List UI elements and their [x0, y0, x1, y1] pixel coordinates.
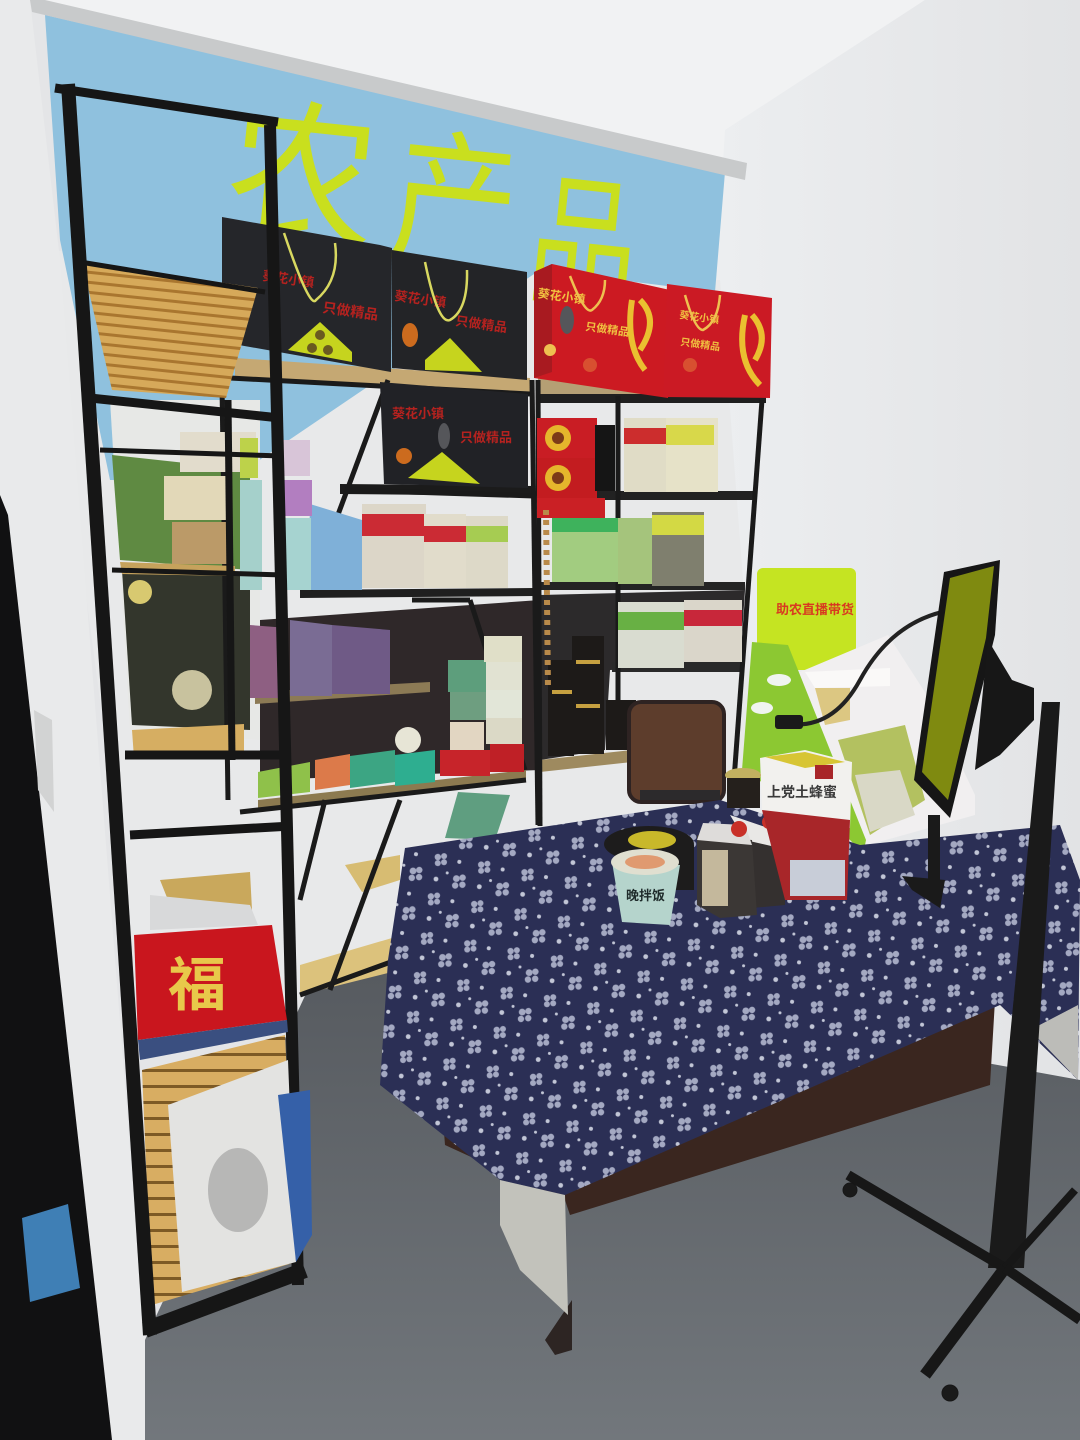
purple bags — [250, 620, 390, 698]
green sign — [757, 568, 856, 670]
stand pole — [988, 702, 1060, 1268]
right shelf unit — [538, 378, 766, 826]
phone clip — [775, 715, 803, 729]
gift box 1: 只做精品 — [322, 299, 379, 323]
instant noodle cup: 晚拌饭 — [626, 888, 665, 903]
products on right shelf — [537, 418, 742, 756]
cups on left tower — [164, 432, 312, 590]
brown chair — [629, 702, 724, 802]
roller blind bar — [30, 0, 747, 180]
stacked cups — [440, 636, 524, 776]
seed bags — [362, 504, 508, 588]
red gift box 1: 只做精品 — [585, 319, 630, 339]
red sunflower boxes — [537, 418, 615, 518]
red fu bags: 福 — [168, 953, 226, 1018]
middle shelf unit — [222, 358, 538, 995]
gift box 1: 葵花小镇 — [262, 268, 315, 290]
monitor — [914, 560, 1000, 818]
bagged product — [838, 725, 925, 835]
dark table body — [440, 990, 995, 1215]
gift box 3: 只做精品 — [460, 430, 512, 445]
left tall shelf — [55, 84, 305, 1335]
frame — [55, 84, 305, 1335]
bag under shelf — [445, 792, 510, 840]
products on table — [604, 750, 852, 925]
door hinge — [22, 1204, 80, 1302]
monitor mount — [975, 640, 1034, 770]
shelf frame — [222, 378, 538, 995]
white steps — [790, 635, 975, 850]
banner headline: 农 — [218, 83, 386, 274]
green side panel — [742, 642, 866, 845]
gift box 3 — [380, 382, 528, 488]
dark tub behind — [725, 768, 761, 808]
red gift box 2: 只做精品 — [680, 335, 721, 354]
honey jugs — [697, 815, 785, 918]
products on middle shelf — [250, 504, 524, 840]
blue banner with headline — [45, 15, 725, 480]
red gift box 1: 葵花小镇 — [537, 285, 586, 307]
gift box 2: 葵花小镇 — [394, 288, 447, 310]
beaded string — [546, 510, 548, 690]
gift box 1 — [222, 217, 392, 372]
black tubs — [548, 636, 636, 756]
gift box 2 — [392, 250, 527, 380]
monitor on stand — [843, 560, 1080, 1401]
blue bag — [308, 504, 362, 590]
ceiling — [30, 0, 925, 170]
bowl with lid — [604, 826, 694, 890]
green display stand — [742, 568, 975, 850]
red gift box 2 — [663, 284, 772, 398]
banner headline: 产 — [382, 116, 526, 295]
green sign: 助农直播带货 — [776, 602, 854, 617]
table cloth — [380, 800, 1080, 1315]
slatted top shelf — [82, 262, 258, 398]
white paper bag — [168, 1060, 312, 1292]
shelf boards — [235, 358, 530, 392]
seed bags lower — [618, 600, 742, 668]
door frame — [0, 495, 112, 1440]
seed bags middle — [552, 512, 704, 586]
red gift box 1 — [534, 264, 670, 398]
right wall — [715, 0, 1080, 1085]
poster behind shelf — [110, 400, 540, 780]
wall switch — [34, 710, 54, 812]
lower slats — [142, 1035, 296, 1305]
gooseneck cable — [778, 612, 942, 724]
seed bags upper — [624, 418, 718, 492]
banner headline — [218, 83, 646, 330]
red gift boxes — [534, 264, 772, 398]
instant noodle cup — [611, 849, 680, 925]
left wall — [0, 0, 145, 1440]
gift box 2: 只做精品 — [455, 313, 508, 335]
red fu bags — [134, 895, 288, 1060]
snack packs — [258, 750, 435, 798]
floor — [145, 960, 1080, 1440]
back wall — [40, 250, 760, 1000]
gift box 3: 葵花小镇 — [392, 406, 444, 421]
honey carton — [760, 750, 852, 900]
table leg — [545, 1300, 572, 1355]
stand base — [843, 1175, 1080, 1401]
black gift boxes — [222, 217, 528, 488]
banner headline: 品 — [522, 160, 646, 330]
red gift box 2: 葵花小镇 — [679, 308, 720, 327]
honey carton: 上党土蜂蜜 — [767, 784, 837, 800]
